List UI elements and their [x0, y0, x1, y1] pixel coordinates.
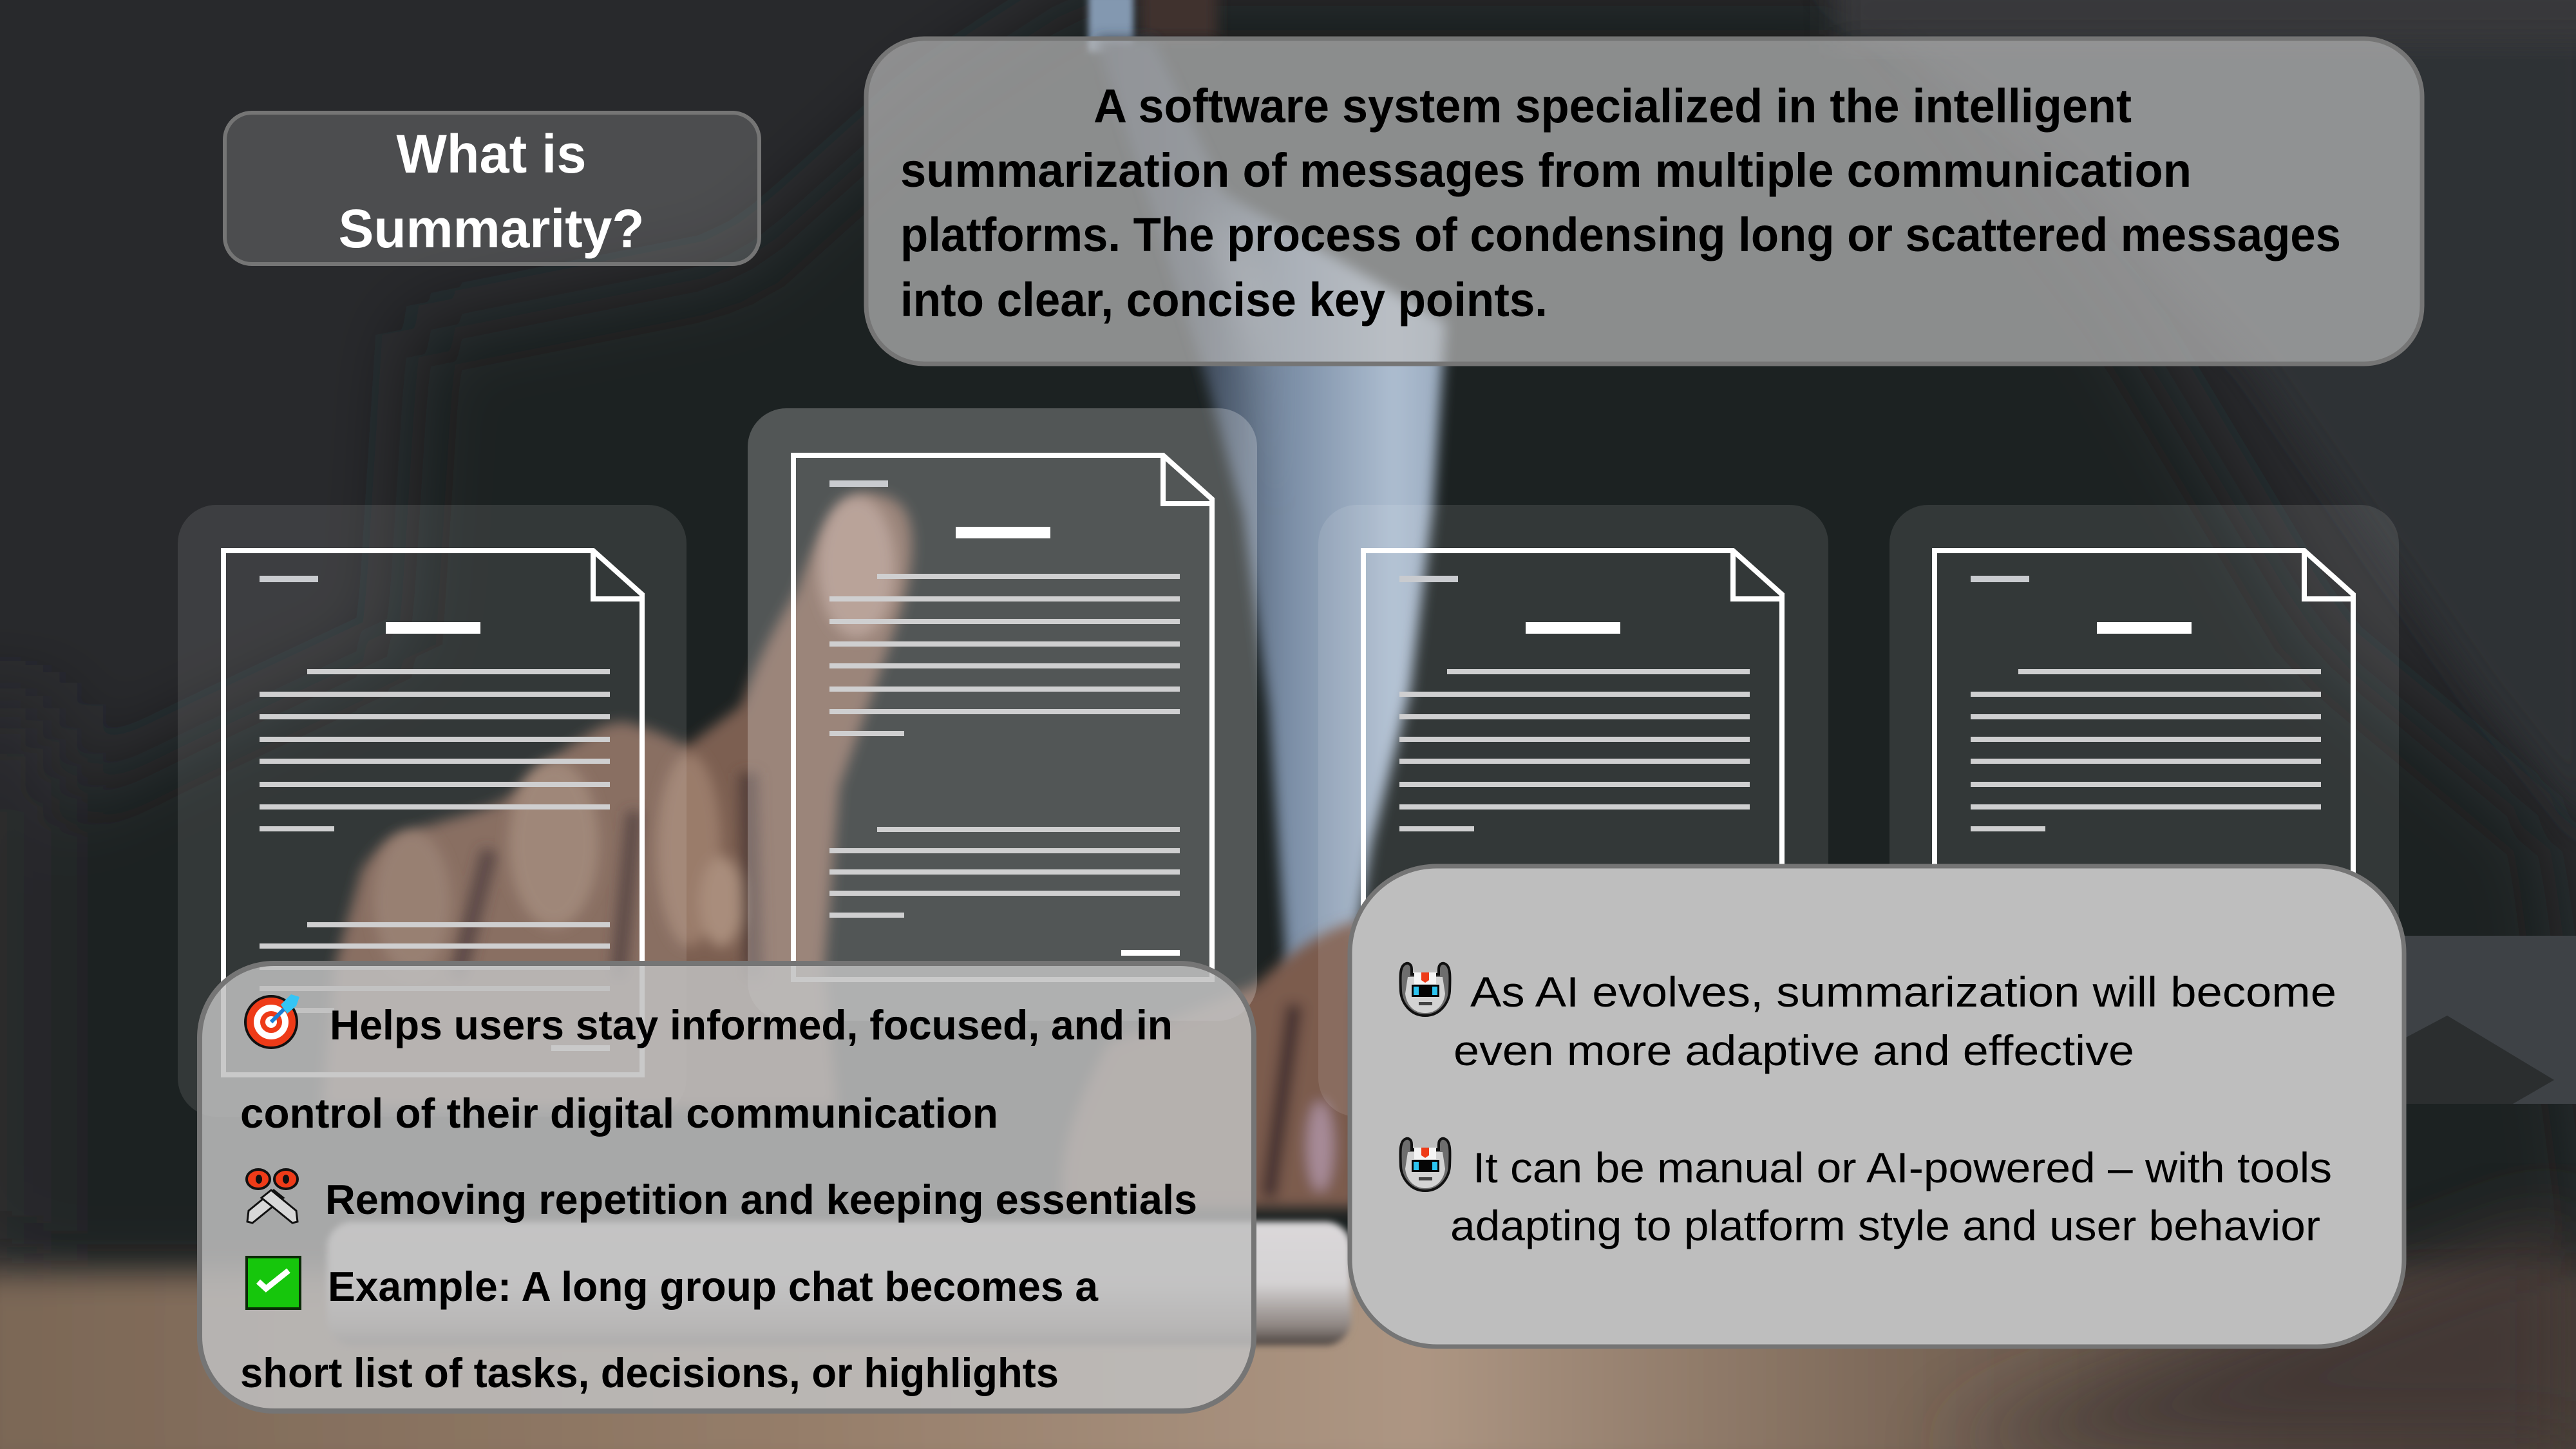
- title: What is: [397, 124, 586, 184]
- panel: definition text: [866, 39, 2422, 364]
- panel: benefits list: control of their digital communication: [240, 1090, 998, 1137]
- panel: definition text: platforms. The process of condensing long or scattered messages: [900, 208, 2341, 261]
- panel: third document card: [1318, 505, 1828, 1117]
- panel: benefits list: Example: A long group chat becomes a: [328, 1263, 1099, 1310]
- panel: benefits list: short list of tasks, decisions, or highlights: [240, 1349, 1059, 1396]
- icon: left document: [223, 551, 642, 1075]
- panel: AI outlook: adapting to platform style and user behavior: [1450, 1202, 2320, 1249]
- panel: AI outlook: [1350, 866, 2404, 1347]
- icon: robot face 2: [1401, 1139, 1450, 1191]
- panel: fourth document card: [1889, 505, 2399, 1117]
- desk: [0, 1272, 2576, 1449]
- panel: AI outlook: As AI evolves, summarization will become: [1470, 968, 2336, 1016]
- icon: fourth document: [1935, 551, 2353, 1075]
- panel: definition text: into clear, concise key points.: [900, 273, 1548, 327]
- shirt: [1088, 0, 1133, 52]
- panel: centre document card: [748, 408, 1257, 1021]
- panel: benefits list: [200, 963, 1254, 1411]
- panel: AI outlook: even more adaptive and effective: [1454, 1027, 2134, 1074]
- icon: third document: [1363, 551, 1782, 1075]
- icon: scissors: [247, 1170, 298, 1223]
- panel: benefits list: Removing repetition and keeping essentials: [325, 1176, 1197, 1223]
- pointing hand: [322, 493, 912, 1108]
- panel: definition text: summarization of messages from multiple communication: [900, 144, 2192, 197]
- second hand: [1061, 921, 1359, 1208]
- panel: AI outlook: It can be manual or AI-powered – with tools: [1473, 1144, 2332, 1191]
- icon: robot face 1: [1401, 963, 1450, 1016]
- panel: definition text: A software system specialized in the intelligent: [1094, 79, 2132, 133]
- panel: left document card: [178, 505, 687, 1117]
- icon: centre document: [793, 455, 1212, 980]
- title: Summarity?: [339, 198, 644, 259]
- icon: green check box: [247, 1257, 300, 1309]
- keyboard: [327, 1222, 1351, 1345]
- icon: target with dart: [245, 994, 299, 1048]
- title: [225, 113, 759, 264]
- background ribbon: [2383, 936, 2576, 1104]
- panel: benefits list: Helps users stay informed, focused, and in: [330, 1001, 1173, 1048]
- neck: [1140, 0, 1217, 39]
